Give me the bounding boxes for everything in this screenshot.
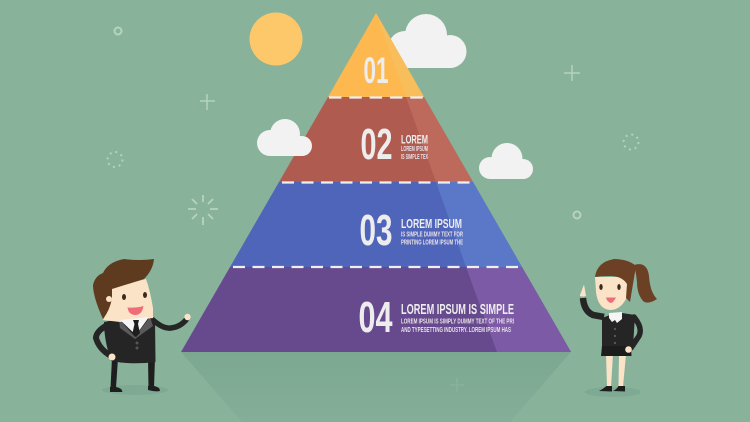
mouth [606, 298, 616, 303]
shirt [120, 317, 149, 335]
raised arm [583, 298, 604, 317]
text block 03: LOREM IPSUM [401, 216, 462, 231]
buttons [614, 328, 616, 330]
hands [184, 314, 191, 320]
head [595, 277, 630, 310]
collar [609, 312, 622, 323]
ear [106, 296, 112, 302]
cloud: behind pyramid top [388, 14, 466, 68]
hair [595, 259, 636, 302]
pointing finger [580, 284, 586, 296]
text block 03: PRINTING LOREM IPSUM THE [401, 240, 463, 246]
skirt [601, 346, 632, 356]
tier 3: blue [230, 182, 522, 267]
faint plus on shadow [450, 378, 464, 392]
dashed dividers [233, 98, 522, 267]
text block 03: IS SIMPLE DUMMY TEXT FOR [401, 232, 463, 238]
businesswoman [580, 259, 657, 397]
text block 03 [401, 216, 463, 246]
tier 2: red [279, 97, 473, 182]
hand on hip [625, 346, 632, 353]
decorative marks left [108, 28, 218, 225]
ponytail [634, 264, 657, 303]
mouth [128, 306, 144, 315]
tier 1: yellow [328, 13, 424, 97]
decorative marks right [564, 65, 638, 218]
arm on hip [631, 317, 640, 348]
head [103, 279, 153, 322]
shadow [585, 387, 641, 397]
pyramid [181, 13, 571, 352]
businessman [93, 259, 191, 395]
tie [132, 320, 140, 337]
legs [606, 354, 626, 387]
left arm [96, 324, 111, 356]
eyes [599, 284, 603, 290]
right arm [153, 320, 186, 328]
text block 02: LOREM [401, 134, 428, 146]
text block 02 [401, 134, 428, 161]
text block 04: AND TYPESETTING INDUSTRY. LOREM IPSUM HAS [401, 327, 511, 334]
legs [110, 358, 155, 388]
shoes [599, 386, 625, 392]
shadow [102, 385, 168, 395]
text block 04: LOREM IPSUM IS SIMPLY DUMMY TEXT OF THE PRI [401, 318, 514, 326]
buttons [136, 342, 138, 344]
number 02: 02 [360, 120, 392, 169]
jacket [104, 316, 156, 363]
sun [250, 12, 302, 66]
number 03: 03 [360, 206, 392, 255]
text block 02: LOREM IPSUM [401, 146, 428, 153]
jacket [602, 313, 635, 347]
number 04: 04 [358, 293, 393, 342]
text block 04 [401, 301, 514, 334]
cloud: left [257, 119, 312, 156]
lapels [119, 317, 153, 339]
tier 4: purple [181, 267, 571, 352]
hair [93, 259, 154, 319]
eyes [122, 294, 126, 300]
number 01: 01 [364, 50, 388, 91]
text block 04: LOREM IPSUM IS SIMPLE [401, 301, 514, 318]
text block 02: IS SIMPLE TEX [401, 154, 428, 161]
shoes [110, 386, 160, 392]
cloud: right [479, 143, 533, 179]
pyramid ground shadow [181, 352, 571, 422]
